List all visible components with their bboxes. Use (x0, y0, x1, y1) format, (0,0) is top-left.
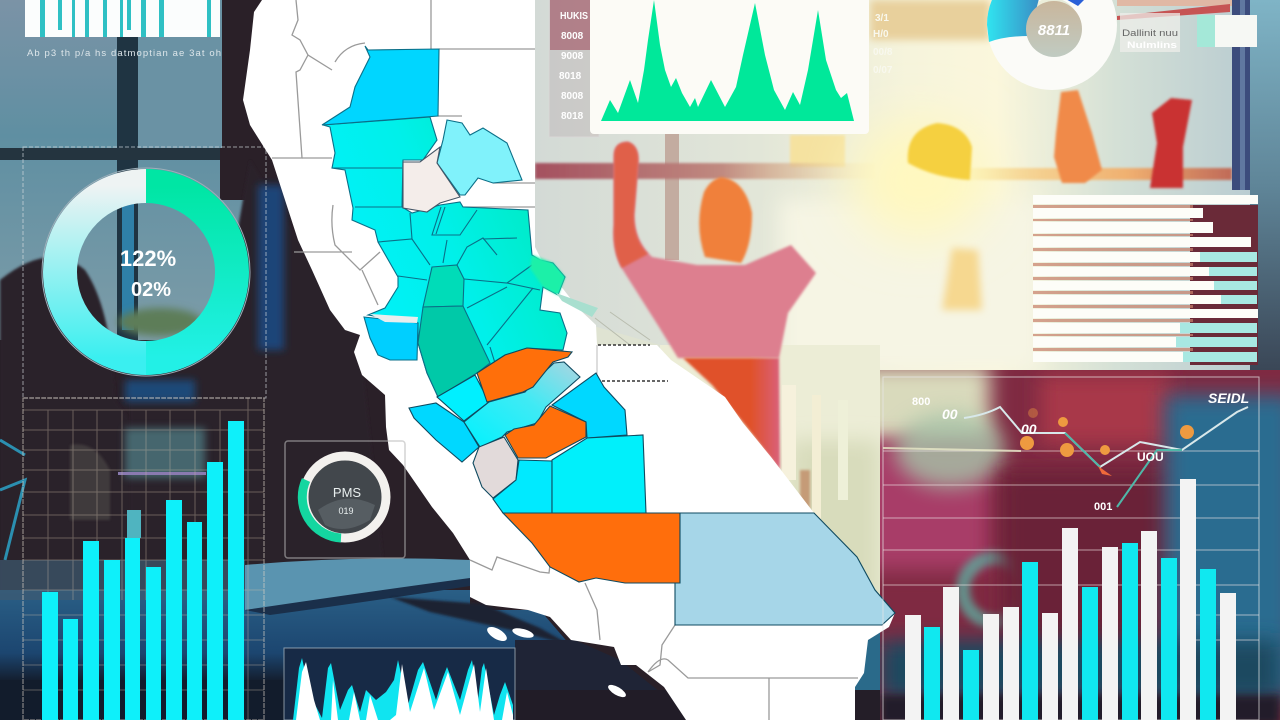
county: beige (403, 147, 460, 212)
line series (883, 407, 1248, 507)
line labels: SEIDL (1208, 390, 1249, 406)
donut values (120, 246, 176, 301)
bay highlight (370, 314, 418, 323)
panel: bottom right combo chart (883, 377, 1259, 720)
map islands (485, 624, 628, 699)
person with raised arms (614, 142, 816, 470)
axis labels: 8018 (559, 71, 582, 82)
panel: small donut (285, 441, 405, 558)
county: big orange (503, 513, 680, 583)
line markers (1020, 408, 1194, 476)
county: pale north-east (437, 120, 522, 195)
dashed lines (598, 345, 668, 381)
axis labels: 8018 (561, 111, 584, 122)
panel: green area chart (590, 0, 869, 134)
county: cyan M (493, 460, 552, 513)
line labels: 800 (912, 396, 930, 408)
line labels: 00 (1021, 421, 1037, 437)
panel: donut frame (23, 147, 266, 398)
top right labels: Nulmlins (1127, 40, 1177, 50)
axis labels: HUKIS (560, 11, 588, 22)
small donut values: PMS (333, 485, 361, 500)
axis labels (559, 11, 588, 122)
county: orange central (505, 406, 586, 458)
labels beside green panel: 0/07 (873, 65, 893, 76)
line labels: UOU (1137, 450, 1164, 464)
green eastern patch (530, 255, 565, 295)
county: orange north (477, 348, 572, 402)
strip caption: Ab p3 th p/a hs datmoptian ae 3at oh (27, 48, 221, 59)
axis labels: 8008 (561, 91, 584, 102)
donut chart (42, 168, 250, 376)
labels beside green panel: H/0 (873, 29, 889, 40)
axis labels: 8008 (561, 31, 584, 42)
top right donut (987, 0, 1098, 71)
county: top blue (322, 46, 439, 125)
gray county lines (272, 0, 858, 720)
axis labels: 9008 (561, 51, 584, 62)
line labels: 00 (942, 406, 958, 422)
donut values: 122% (120, 246, 176, 271)
top donut value: 8811 (1038, 22, 1070, 39)
top right labels: Dallinit nuu (1122, 28, 1178, 38)
county: strip (464, 362, 580, 447)
panel: bottom spike chart (284, 648, 515, 720)
panel: small donut: 019 (338, 506, 354, 516)
map of California (243, 0, 895, 720)
pale tongue (556, 293, 598, 317)
labels beside green panel: 3/1 (875, 13, 889, 24)
northern and central counties (322, 46, 567, 397)
state silhouette (243, 0, 895, 720)
donut values: 02% (131, 279, 171, 301)
labels beside green panel: 00/8 (873, 47, 893, 58)
left bars (42, 421, 244, 720)
southern counties (409, 348, 895, 625)
people celebrating (614, 90, 1192, 470)
county: cyan N (552, 435, 646, 513)
county lines (332, 168, 540, 363)
line labels: 001 (1094, 501, 1112, 513)
raised arm red (1150, 98, 1192, 188)
top left bar strip (25, 0, 220, 37)
panel: left bar chart (23, 398, 264, 720)
county: lower teal (418, 306, 490, 397)
helmet person (908, 123, 982, 310)
labels beside green panel (873, 13, 893, 76)
line labels (912, 390, 1249, 513)
panel: top line chart axis (549, 0, 599, 137)
county: pale blue (675, 513, 895, 625)
top right labels (1120, 13, 1257, 52)
county: bay blue (364, 317, 418, 360)
county: blue J (409, 403, 479, 462)
county: blue K (552, 373, 627, 438)
county: cyan I (437, 375, 489, 421)
county: beige south (473, 437, 518, 498)
raised arm orange (1054, 90, 1102, 183)
stripe bars (1033, 195, 1258, 365)
county: upper teal (423, 265, 464, 307)
right bars (905, 479, 1236, 720)
small donut ring (302, 456, 386, 538)
